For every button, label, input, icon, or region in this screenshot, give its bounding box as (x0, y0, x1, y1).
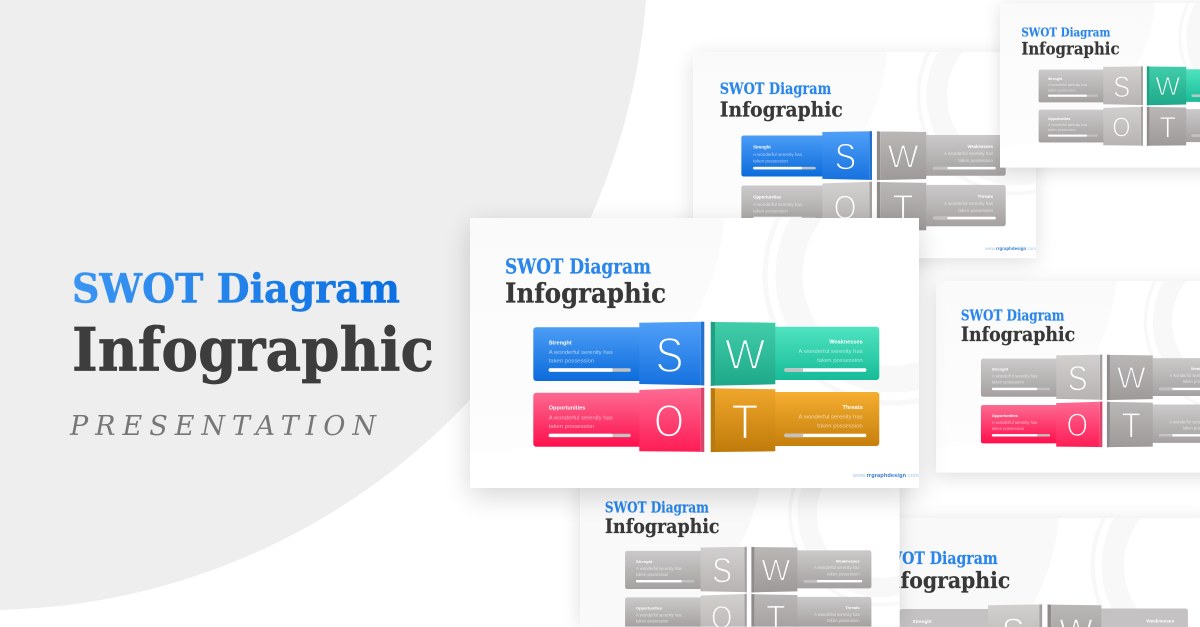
slide: top right, Weaknesses highlighted: Opportunities (1048, 117, 1070, 121)
slide: right middle, Opportunities highlighted: S (1068, 360, 1088, 398)
panel: Weaknesses: taken possession (817, 358, 863, 364)
slide: bottom left, all grey: taken possession (636, 572, 669, 577)
tile: O: O (654, 396, 684, 446)
slide: right middle, Opportunities highlighted (930, 279, 1200, 483)
slide: top middle, Strength highlighted: S (835, 136, 856, 178)
panel: Weaknesses: Weaknesses (829, 340, 863, 346)
panel: Threats (770, 392, 879, 446)
slide: top right, Weaknesses highlighted: T (1160, 112, 1176, 145)
slide: top middle, Strength highlighted: Infographic (720, 97, 843, 121)
slide: bottom left, all grey: Weaknesses (836, 558, 860, 563)
panel: Opportunities (533, 393, 643, 447)
slide: bottom left, all grey: taken possession (636, 619, 669, 624)
slide: right middle, Opportunities highlighted: A wonderful serenity has (992, 374, 1037, 379)
slide: right middle, Opportunities highlighted: O (1067, 407, 1088, 443)
panel: Opportunities: Opportunities (549, 406, 585, 412)
slide: top middle, Strength highlighted: taken possession (753, 208, 788, 213)
panel: Opportunities: A wonderful serenity has (549, 415, 613, 421)
slide: bottom left, all grey: S (712, 552, 732, 591)
slide: top right, Weaknesses highlighted: O (1112, 111, 1131, 142)
panel: Threats: Threats (842, 405, 863, 411)
slide: bottom left, all grey: taken possession (827, 572, 860, 577)
slide: top middle, Strength highlighted: Threats (978, 194, 994, 199)
slide: right middle, Opportunities highlighted: taken possession (992, 380, 1025, 385)
subheading: PRESENTATION: PRESENTATION (69, 411, 377, 442)
slide: right middle, Opportunities highlighted: Opportunities (992, 413, 1019, 418)
slide title: SWOT Diagram (505, 254, 651, 278)
slide: right middle, Opportunities highlighted: Infographic (961, 323, 1075, 346)
slide: right middle, Opportunities highlighted: W (1117, 361, 1146, 395)
slide: bottom left, all grey: A wonderful serenity has (636, 612, 682, 617)
slide: top middle, Strength highlighted: A wonderful serenity has (753, 202, 803, 207)
panel: Strength: taken possession (549, 359, 594, 365)
slide: top right, Weaknesses highlighted: A wonderful serenity has (1048, 123, 1087, 127)
panel: Weaknesses: A wonderful serenity has (799, 349, 863, 355)
slide: right middle, Opportunities highlighted: A wonderful serenity has (992, 420, 1037, 425)
slide: top middle, Strength highlighted: taken possession (958, 208, 994, 213)
slide: top right, Weaknesses highlighted: taken possession (1048, 88, 1076, 92)
slide: top middle, Strength highlighted: T (893, 186, 913, 228)
slide: top right, Weaknesses highlighted: S (1113, 71, 1130, 104)
slide: top right, Weaknesses highlighted: Strenght (1048, 77, 1063, 81)
slide: bottom right, all grey (900, 516, 1200, 627)
slide: top right, Weaknesses highlighted: Infographic (1021, 39, 1120, 58)
heading: Infographic: Infographic (72, 316, 434, 386)
slide: top middle, Strength highlighted: A wonderful serenity has (753, 152, 803, 157)
slide: bottom left, all grey: Threats (845, 605, 860, 610)
slide: top middle, Strength highlighted: O (834, 189, 856, 227)
slide: bottom left, all grey: A wonderful serenity has (814, 612, 860, 617)
slide: bottom left, all grey: Infographic (605, 515, 720, 538)
slide: top right, Weaknesses highlighted: A wonderful serenity has (1048, 83, 1087, 87)
slide: top middle, Strength highlighted: SWOT Diagram (720, 79, 832, 98)
slide: bottom left, all grey: A wonderful serenity has (814, 565, 860, 570)
slide: bottom right, all grey: SWOT Diagram (876, 549, 998, 569)
slide: right middle, Opportunities highlighted: T (1122, 408, 1141, 446)
panel: Strength (533, 327, 643, 381)
tile: W (711, 322, 775, 386)
panel: Strength: A wonderful serenity has (549, 350, 613, 356)
slide: top middle, Strength highlighted (687, 50, 1042, 269)
slide: bottom left, all grey: Opportunities (636, 605, 663, 610)
slide: top middle, Strength highlighted: www.rrgraphdesign.com (985, 246, 1036, 251)
slide: bottom right, all grey: Infographic (876, 568, 1010, 594)
website credit: www.rrgraphdesign.com (852, 473, 919, 479)
slide: top middle, Strength highlighted: taken possession (753, 159, 788, 164)
slide: bottom left, all grey (574, 488, 906, 627)
slide: bottom right, all grey: Weaknesses (1146, 619, 1175, 624)
slide: right middle, Opportunities highlighted: taken possession (992, 426, 1025, 431)
slide: bottom left, all grey: Strenght (636, 559, 653, 564)
slide: top right, Weaknesses highlighted (994, 2, 1200, 176)
grey background circle (0, 0, 648, 610)
slide title (505, 254, 666, 309)
tile: W: W (725, 331, 766, 379)
panel: Threats: taken possession (817, 424, 863, 430)
slide: bottom left, all grey: SWOT Diagram (605, 499, 709, 516)
slide: top middle, Strength highlighted: Weaknesses (967, 144, 994, 149)
slide: main full-colour SWOT diagram (459, 215, 930, 507)
slide: bottom left, all grey: taken possession (827, 618, 860, 623)
panel: Weaknesses (770, 327, 879, 380)
tile: S: S (656, 329, 684, 383)
slide: top middle, Strength highlighted: Strenght (753, 144, 771, 149)
slide: top right, Weaknesses highlighted: SWOT Diagram (1021, 25, 1110, 40)
tile: T (711, 388, 775, 452)
panel: Strength: Strenght (549, 340, 572, 346)
slide: top right, Weaknesses highlighted: taken possession (1048, 128, 1076, 132)
slide: top middle, Strength highlighted: taken possession (958, 158, 994, 163)
tile: T: T (732, 396, 758, 450)
slide: top right, Weaknesses highlighted: W (1155, 71, 1180, 101)
slide: top middle, Strength highlighted: W (888, 137, 919, 174)
slide title: Infographic (505, 278, 666, 309)
slide: bottom right, all grey: Strenght (913, 619, 932, 624)
slide: right middle, Opportunities highlighted: SWOT Diagram (961, 307, 1065, 324)
slide: bottom left, all grey: W (761, 554, 790, 588)
slide: right middle, Opportunities highlighted: Strenght (992, 367, 1009, 372)
panel: Opportunities: taken possession (549, 424, 594, 430)
slide: top middle, Strength highlighted: A wonderful serenity has (944, 201, 994, 206)
slide: bottom left, all grey: A wonderful serenity has (636, 566, 682, 571)
tile: S (639, 322, 704, 386)
slide: top middle, Strength highlighted: A wonderful serenity has (944, 151, 994, 156)
slide: top middle, Strength highlighted: Opportunities (753, 194, 782, 199)
tile: O (639, 388, 704, 452)
panel: Threats: A wonderful serenity has (799, 414, 863, 420)
heading: SWOT Diagram: SWOT Diagram (72, 266, 400, 313)
